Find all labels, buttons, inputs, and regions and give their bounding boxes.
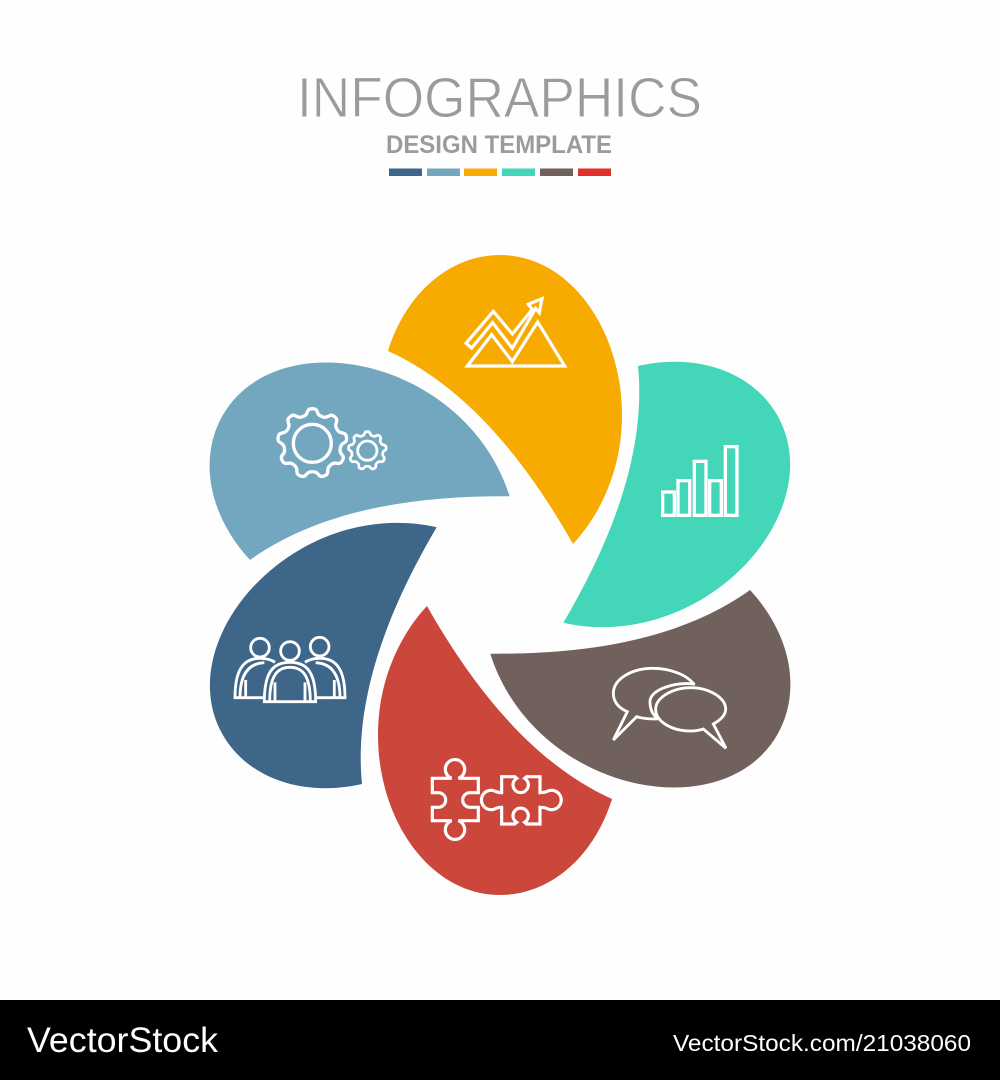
petal: yellow bbox=[388, 255, 622, 544]
icon: puzzle pieces bbox=[432, 760, 561, 839]
footer brand: VectorStock bbox=[27, 1021, 219, 1060]
icon: bar chart bbox=[663, 447, 737, 515]
icon: speech bubbles bbox=[613, 668, 726, 748]
petal: turquoise bbox=[471, 318, 838, 665]
footer bar bbox=[0, 1000, 1000, 1080]
icon: rising arrow over mountains bbox=[466, 299, 565, 366]
petal: dark blue bbox=[162, 485, 529, 832]
title: INFOGRAPHICS bbox=[297, 66, 702, 130]
subtitle: DESIGN TEMPLATE bbox=[386, 131, 612, 159]
petal: brown bbox=[466, 494, 833, 841]
petal: red bbox=[378, 606, 612, 895]
icon: team of people bbox=[235, 637, 345, 702]
icon: gears bbox=[277, 409, 387, 479]
colour legend bars bbox=[389, 168, 611, 176]
petal: light blue bbox=[167, 309, 534, 656]
footer image id: VectorStock.com/21038060 bbox=[673, 1030, 971, 1056]
